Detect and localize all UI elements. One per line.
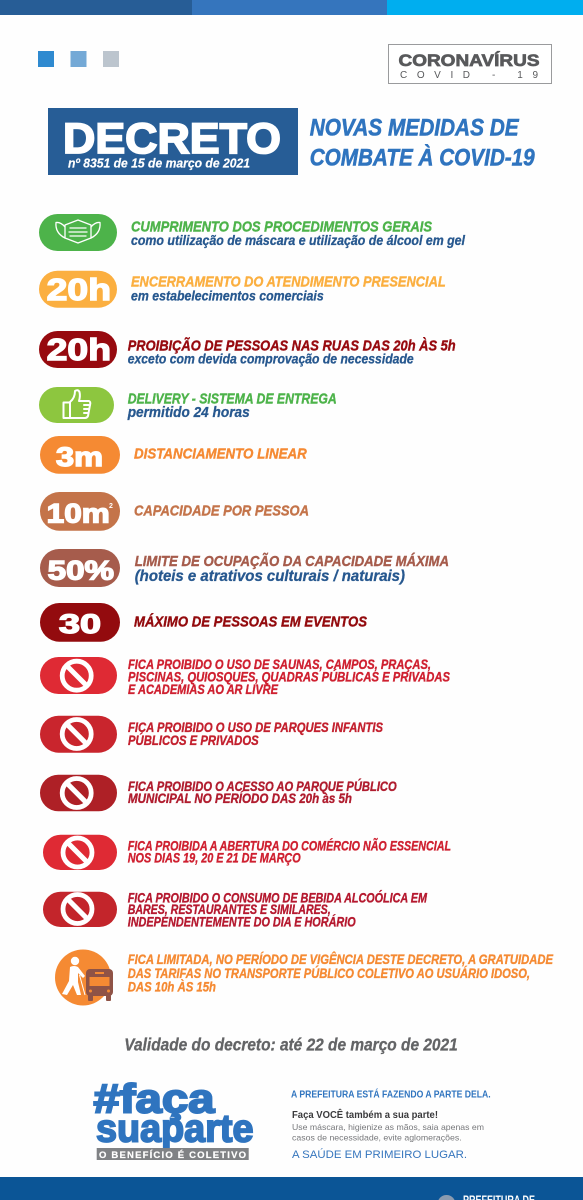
row: prohibited non-essential commerce <box>43 835 451 870</box>
text: playgrounds: PÚBLICOS E PRIVADOS <box>128 733 259 748</box>
text: delivery: DELIVERY - SISTEMA DE ENTREGA <box>128 390 337 407</box>
text: alcohol <box>128 891 428 930</box>
row: 3m distance <box>40 436 307 474</box>
text: park access: FICA PROIBIDO O ACESSO AO PARQUE PÚBLICO <box>128 779 397 794</box>
text: playgrounds <box>128 720 383 748</box>
text: closing: ENCERRAMENTO DO ATENDIMENTO PRESENCIAL <box>131 273 446 290</box>
campaign message: Faça VOCÊ também a sua parte! <box>292 1108 438 1121</box>
badge: 30: 30 <box>59 609 101 639</box>
text: curfew: PROIBIÇÃO DE PESSOAS NAS RUAS DAS 20h ÀS 5h <box>128 336 456 354</box>
text: park access: MUNICIPAL NO PERÍODO DAS 20h às 5h <box>128 791 352 806</box>
text: distance: DISTANCIAMENTO LINEAR <box>134 445 307 462</box>
badge: 10m2: 2 <box>109 503 113 510</box>
row: prohibited alcohol <box>43 891 428 930</box>
icon: prohibition pill <box>40 657 117 694</box>
title block: decreto <box>48 108 298 175</box>
campaign logo: faça sua parte: #faça <box>94 1076 216 1122</box>
text: mask <box>131 218 466 248</box>
campaign message: Use máscara, higienize as mãos, saia apenas em <box>292 1122 484 1132</box>
campaign message <box>291 1088 491 1161</box>
row: 30 people <box>40 603 367 642</box>
footer band <box>0 1177 583 1200</box>
icon: prohibition pill <box>43 835 117 870</box>
text: park access <box>128 779 397 806</box>
badge: 50% <box>40 549 120 587</box>
text: saunas: E ACADEMIAS AO AR LIVRE <box>128 682 279 697</box>
badge: 20h dark red <box>39 331 117 368</box>
title block: decreto: DECRETO <box>63 115 281 163</box>
row: prohibited saunas <box>40 657 450 697</box>
text: curfew <box>128 336 456 367</box>
campaign logo: faça sua parte: suaparte <box>96 1108 254 1150</box>
text: alcohol: FICA PROIBIDO O CONSUMO DE BEBIDA ALCOÓLICA EM <box>128 891 428 906</box>
badge: 10m2 <box>40 492 120 531</box>
text: occupancy <box>135 552 449 585</box>
row: 50% occupancy <box>40 549 449 587</box>
icon: thumbs up pill <box>39 387 114 423</box>
text: mask: como utilização de máscara e utilização de álcool em gel <box>131 232 466 248</box>
campaign logo: faça sua parte: O BENEFÍCIO É COLETIVO <box>99 1150 246 1161</box>
text: delivery: permitido 24 horas <box>127 404 250 421</box>
heading: novas medidas: NOVAS MEDIDAS DE <box>310 114 520 142</box>
heading: novas medidas: COMBATE À COVID-19 <box>310 143 535 171</box>
validity note: Validade do decreto: até 22 de março de 2021 <box>124 1035 458 1055</box>
campaign message: A PREFEITURA ESTÁ FAZENDO A PARTE DELA. <box>291 1088 491 1101</box>
text: alcohol: BARES, RESTAURANTES E SIMILARES, <box>128 902 331 917</box>
badge: 3m: 3m <box>56 442 103 472</box>
title block: decreto: nº 8351 de 15 de março de 2021 <box>68 156 250 170</box>
text: commerce <box>128 839 451 866</box>
top colour bar <box>0 0 583 15</box>
badge: 20h orange <box>39 271 117 308</box>
badge: 3m <box>40 436 120 474</box>
row: 20h curfew <box>39 331 456 368</box>
text: playgrounds: FICA PROIBIDO O USO DE PARQUES INFANTIS <box>128 720 383 735</box>
text: elderly transport: DAS 10h ÀS 15h <box>128 980 216 995</box>
text: capacity: CAPACIDADE POR PESSOA <box>134 502 309 519</box>
text: saunas: FICA PROIBIDO O USO DE SAUNAS, CAMPOS, PRAÇAS, <box>128 657 431 672</box>
row: elderly transport <box>55 950 554 1006</box>
campaign message: casos de necessidade, evite aglomerações. <box>292 1133 462 1143</box>
campaign message: A SAÚDE EM PRIMEIRO LUGAR. <box>292 1148 467 1161</box>
text: commerce: FICA PROIBIDA A ABERTURA DO COMÉRCIO NÃO ESSENCIAL <box>128 839 451 854</box>
row: prohibited playgrounds <box>40 716 383 753</box>
badge: 10m2: 10m <box>47 499 110 529</box>
icon: prohibition pill <box>40 775 117 811</box>
icon: prohibition pill <box>40 716 117 753</box>
row: delivery <box>39 387 337 423</box>
row: prohibited park access <box>40 775 397 811</box>
text: alcohol: INDEPENDENTEMENTE DO DIA E HORÁRIO <box>128 915 356 930</box>
text: saunas <box>128 657 450 697</box>
text: mask: CUMPRIMENTO DOS PROCEDIMENTOS GERAIS <box>131 218 432 235</box>
text: events: MÁXIMO DE PESSOAS EM EVENTOS <box>134 613 367 630</box>
heading: novas medidas <box>310 114 535 171</box>
text: occupancy: (hoteis e atrativos culturais / naturais) <box>135 568 405 585</box>
icon: elderly person and bus <box>55 950 113 1006</box>
text: elderly transport <box>128 952 554 995</box>
icon: mask pill <box>39 214 117 251</box>
badge: 20h orange: 20h <box>47 272 111 307</box>
badge: 20h dark red: 20h <box>47 332 111 367</box>
row: mask <box>39 214 466 251</box>
text: closing: em estabelecimentos comerciais <box>131 288 324 304</box>
three decorative squares <box>38 51 119 67</box>
text: commerce: NOS DIAS 19, 20 E 21 DE MARÇO <box>128 851 301 866</box>
text: curfew: exceto com devida comprovação de necessidade <box>128 351 414 367</box>
coronavirus badge <box>388 44 552 84</box>
badge: 50%: 50% <box>48 555 114 585</box>
text: delivery <box>127 390 337 421</box>
icon: prohibition pill <box>43 892 117 927</box>
coronavirus badge: COVID - 19 <box>400 70 538 81</box>
text: closing <box>131 273 446 304</box>
row: 20h closing <box>39 271 446 308</box>
text: saunas: PISCINAS, QUIOSQUES, QUADRAS PÚBLICAS E PRIVADAS <box>128 670 450 685</box>
badge: 30 <box>40 603 120 642</box>
row: 10m2 capacity <box>40 492 309 531</box>
campaign logo: faça sua parte <box>94 1076 254 1161</box>
coronavirus badge: CORONAVÍRUS <box>398 51 540 70</box>
text: occupancy: LIMITE DE OCUPAÇÃO DA CAPACIDADE MÁXIMA <box>135 552 449 570</box>
